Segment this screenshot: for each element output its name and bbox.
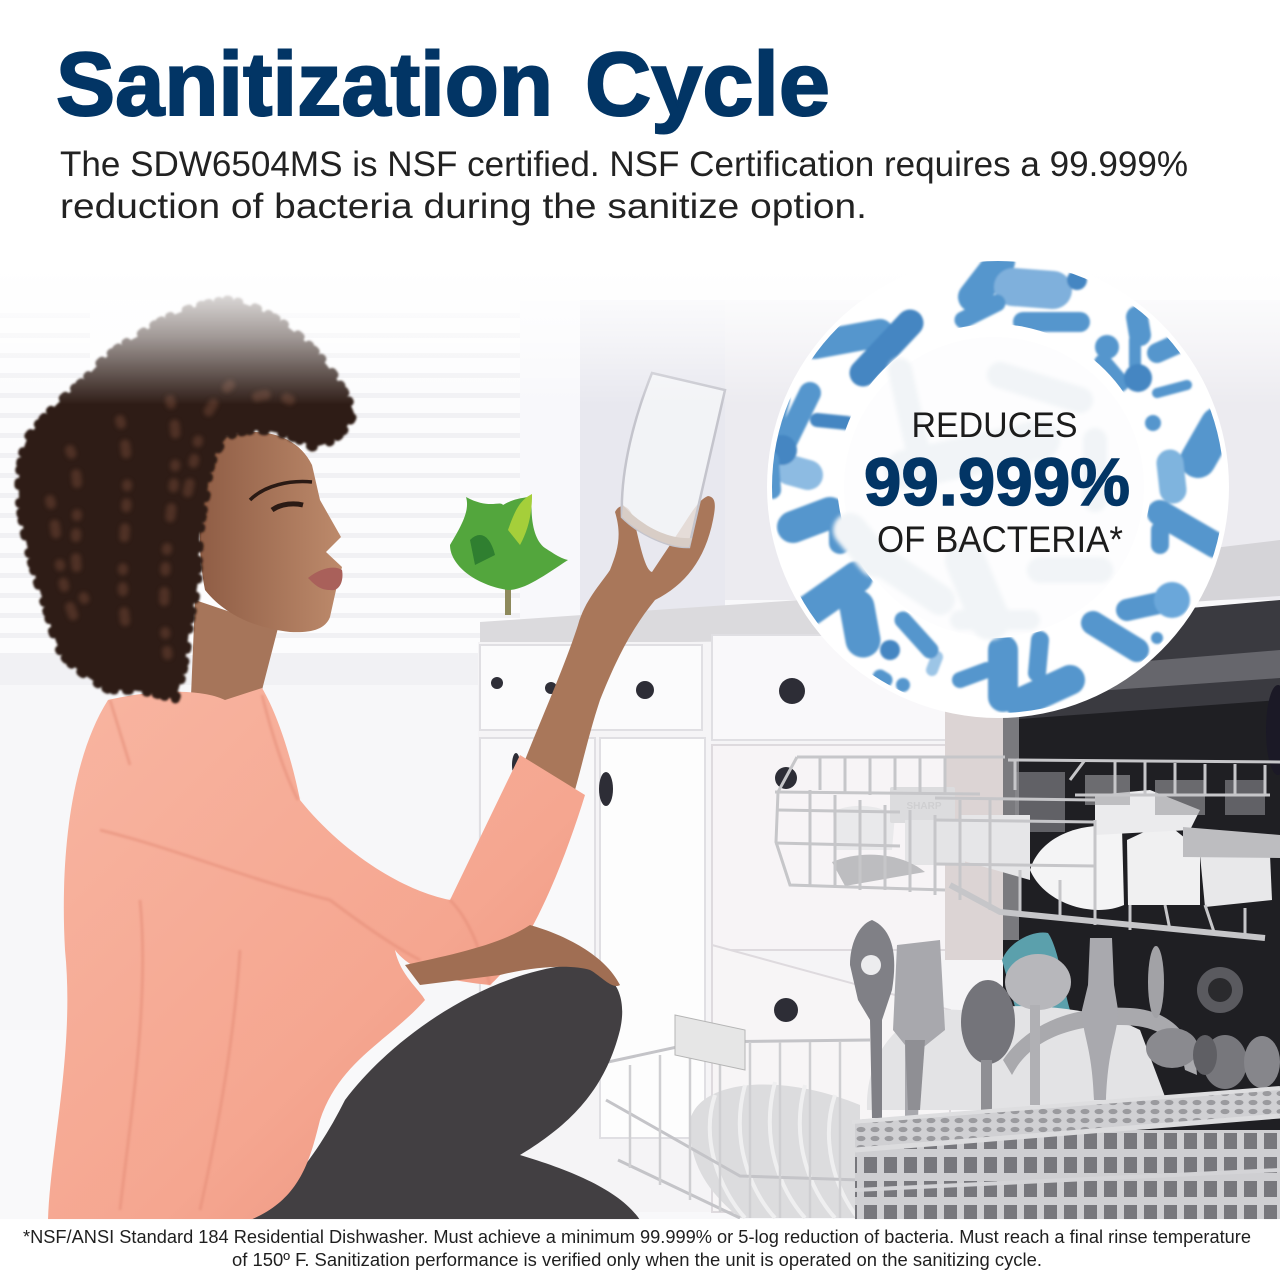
shirt [48, 688, 585, 1220]
raised arm and hand [525, 496, 715, 790]
right countertop [1160, 540, 1280, 604]
plates in front of basket area [867, 1006, 1170, 1110]
white fade from top [0, 235, 1280, 405]
neck [190, 600, 278, 750]
badge text: of bacteria: OF BACTERIA* [877, 519, 1123, 560]
glass [622, 373, 725, 547]
upper rack dishes [832, 772, 1280, 910]
cabinets [478, 635, 1008, 1212]
upper dish rack wires [775, 757, 1280, 938]
leggings [250, 965, 640, 1220]
footnote band: of 150º F. Sanitization performance is verified only when the unit is operated on the sanitizing cycle. [232, 1249, 1042, 1270]
kitchen background [0, 250, 1280, 1220]
shirt folds [100, 695, 490, 1210]
hair [19, 300, 354, 700]
face [200, 432, 342, 632]
title [56, 35, 830, 135]
intro text: The SDW6504MS is NSF certified. NSF Certification requires a 99.999% [60, 145, 1188, 184]
footnote band [0, 1219, 1280, 1280]
woman [19, 300, 725, 1220]
plant [450, 494, 568, 615]
title: Sanitization [56, 35, 553, 135]
countertop [480, 598, 830, 645]
intro text [60, 145, 1188, 226]
dishwasher interior [1000, 600, 1280, 1220]
glass base [622, 505, 692, 547]
badge text: reduces: REDUCES [912, 406, 1078, 445]
intro text: reduction of bacteria during the sanitize option. [60, 187, 867, 226]
brow and eye [250, 482, 312, 510]
SHARP label: SHARP [906, 801, 942, 812]
bacteria circle badge [767, 256, 1229, 718]
footnote band: *NSF/ANSI Standard 184 Residential Dishwasher. Must achieve a minimum 99.999% or 5-log reduction of bacteria. Must reach a final rinse temperature [23, 1226, 1251, 1247]
utensils [850, 920, 1280, 1122]
lower hand on knee [405, 925, 620, 986]
badge text: percentage: 99.999% [864, 445, 1130, 520]
lips [308, 568, 342, 590]
title: Cycle [585, 35, 830, 135]
lower dish rack with plates [606, 1015, 870, 1218]
cutlery basket [852, 1088, 1280, 1220]
